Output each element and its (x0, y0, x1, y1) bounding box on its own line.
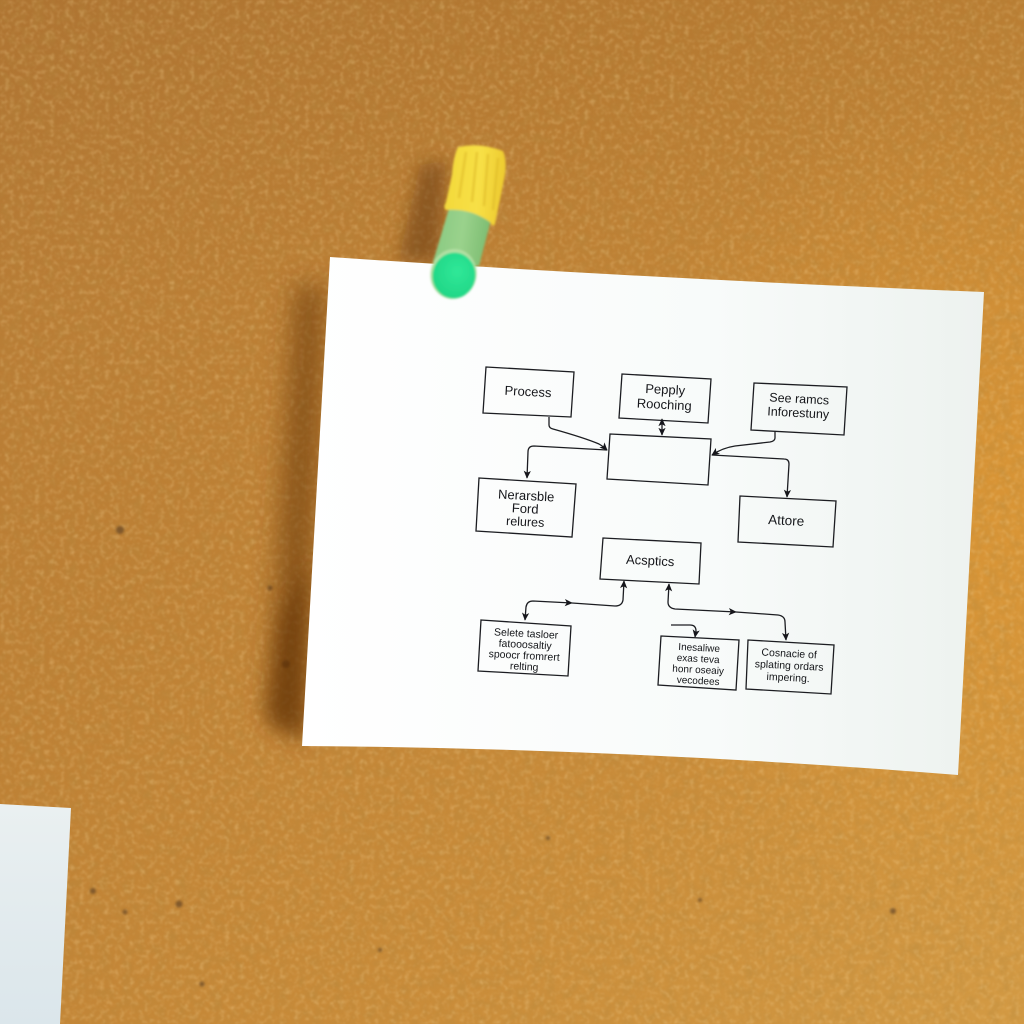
box: Cosnacie of (746, 640, 834, 694)
flowchart diagram (476, 367, 847, 694)
pin shadow (398, 160, 446, 262)
panel: pinned paper sheet (302, 257, 984, 775)
box: See ramcs Inforestuny: See ramcs (769, 390, 829, 408)
box: Inestalive: vecodees (676, 675, 720, 688)
box: See ramcs Inforestuny (751, 383, 847, 435)
box: See ramcs Inforestuny: Inforestuny (767, 404, 830, 422)
box: Selete tasloer: spoocr fromrert (488, 648, 560, 664)
box: Selete tasloer: Selete tasloer (494, 626, 559, 642)
connector arrows (525, 417, 789, 640)
box: Pepply Rooching: Pepply (645, 381, 686, 398)
box: Nerarsble Ford relures: relures (506, 514, 545, 530)
box: Acsptics (600, 538, 701, 584)
box: Selete tasloer (478, 620, 571, 676)
box: central empty node (607, 434, 711, 485)
box: Inestalive (658, 636, 739, 690)
box: Attore: Attore (768, 512, 805, 529)
box: Process: Process (504, 383, 552, 400)
box: Selete tasloer: relting (510, 660, 539, 674)
box: Nerarsble Ford relures: Nerarsble (498, 487, 555, 504)
box: Attore (738, 496, 836, 547)
box: Inestalive: honr oseaiy (672, 664, 724, 677)
box: Pepply Rooching (619, 374, 711, 423)
pin head (426, 245, 481, 303)
box: Inestalive: Inesaliwe (678, 642, 721, 655)
box: Acsptics: Acsptics (626, 552, 675, 569)
box: Cosnacie of: impering. (766, 671, 810, 685)
box: Nerarsble Ford relures: Ford (511, 500, 539, 517)
box: Cosnacie of: splating ordars (754, 658, 824, 674)
box: Selete tasloer: fatooosaltiy (498, 638, 553, 652)
icon: green and yellow push pin (426, 145, 506, 303)
box: Nerarsble Ford relures (476, 478, 576, 537)
panel: second paper corner (0, 804, 71, 1024)
pin cap (444, 145, 506, 226)
paper shadow (266, 285, 325, 745)
box: Inestalive: exas teva (676, 653, 720, 666)
box: Cosnacie of: Cosnacie of (761, 647, 817, 661)
pin barrel (433, 205, 492, 266)
box: Pepply Rooching: Rooching (636, 396, 692, 413)
box: Process (483, 367, 574, 417)
